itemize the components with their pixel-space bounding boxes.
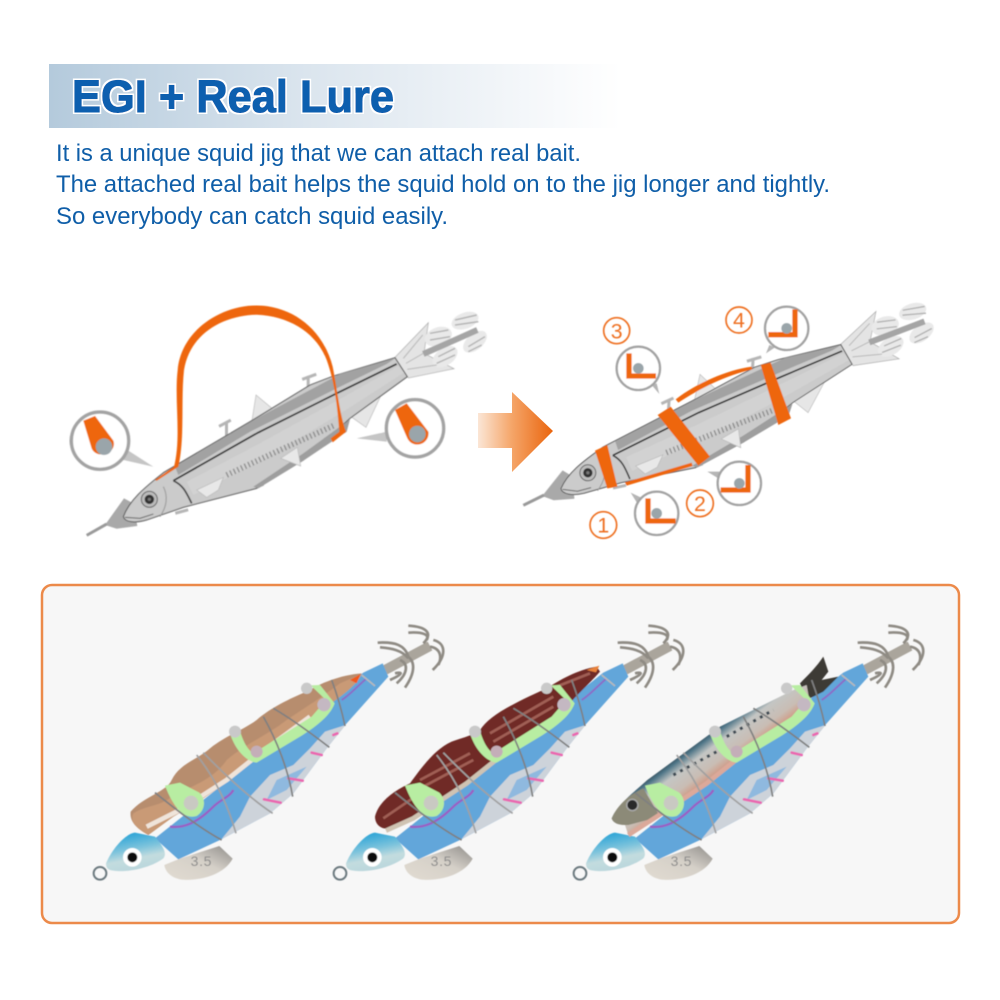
callout 4 (726, 307, 808, 353)
description text (56, 140, 830, 230)
panel: lures with real bait (42, 585, 959, 923)
callout: band end right (357, 400, 444, 457)
number 4: 4 (733, 309, 745, 333)
description text: So everybody can catch squid easily. (56, 203, 448, 230)
diagram: lure with band attached (523, 279, 939, 538)
lure with shrimp (94, 626, 443, 880)
number 2: 2 (694, 492, 706, 516)
number 1: 1 (597, 514, 609, 538)
orange bands (595, 363, 791, 488)
description text: The attached real bait helps the squid hold on to the jig longer and tightly. (56, 171, 830, 198)
diagram: lure with loose band (71, 305, 491, 535)
header band (49, 64, 621, 128)
arrow (478, 392, 553, 472)
callout 1 (590, 492, 678, 538)
lure with dark red bait (334, 626, 683, 880)
orange band loop (155, 305, 346, 481)
title: EGI + Real Lure (72, 71, 394, 122)
lure with sardine (574, 626, 923, 880)
callout 3 (604, 318, 660, 394)
number 3: 3 (611, 319, 623, 343)
callout 2 (687, 462, 761, 517)
callout: band end left (71, 412, 153, 469)
description text: It is a unique squid jig that we can attach real bait. (56, 140, 581, 167)
